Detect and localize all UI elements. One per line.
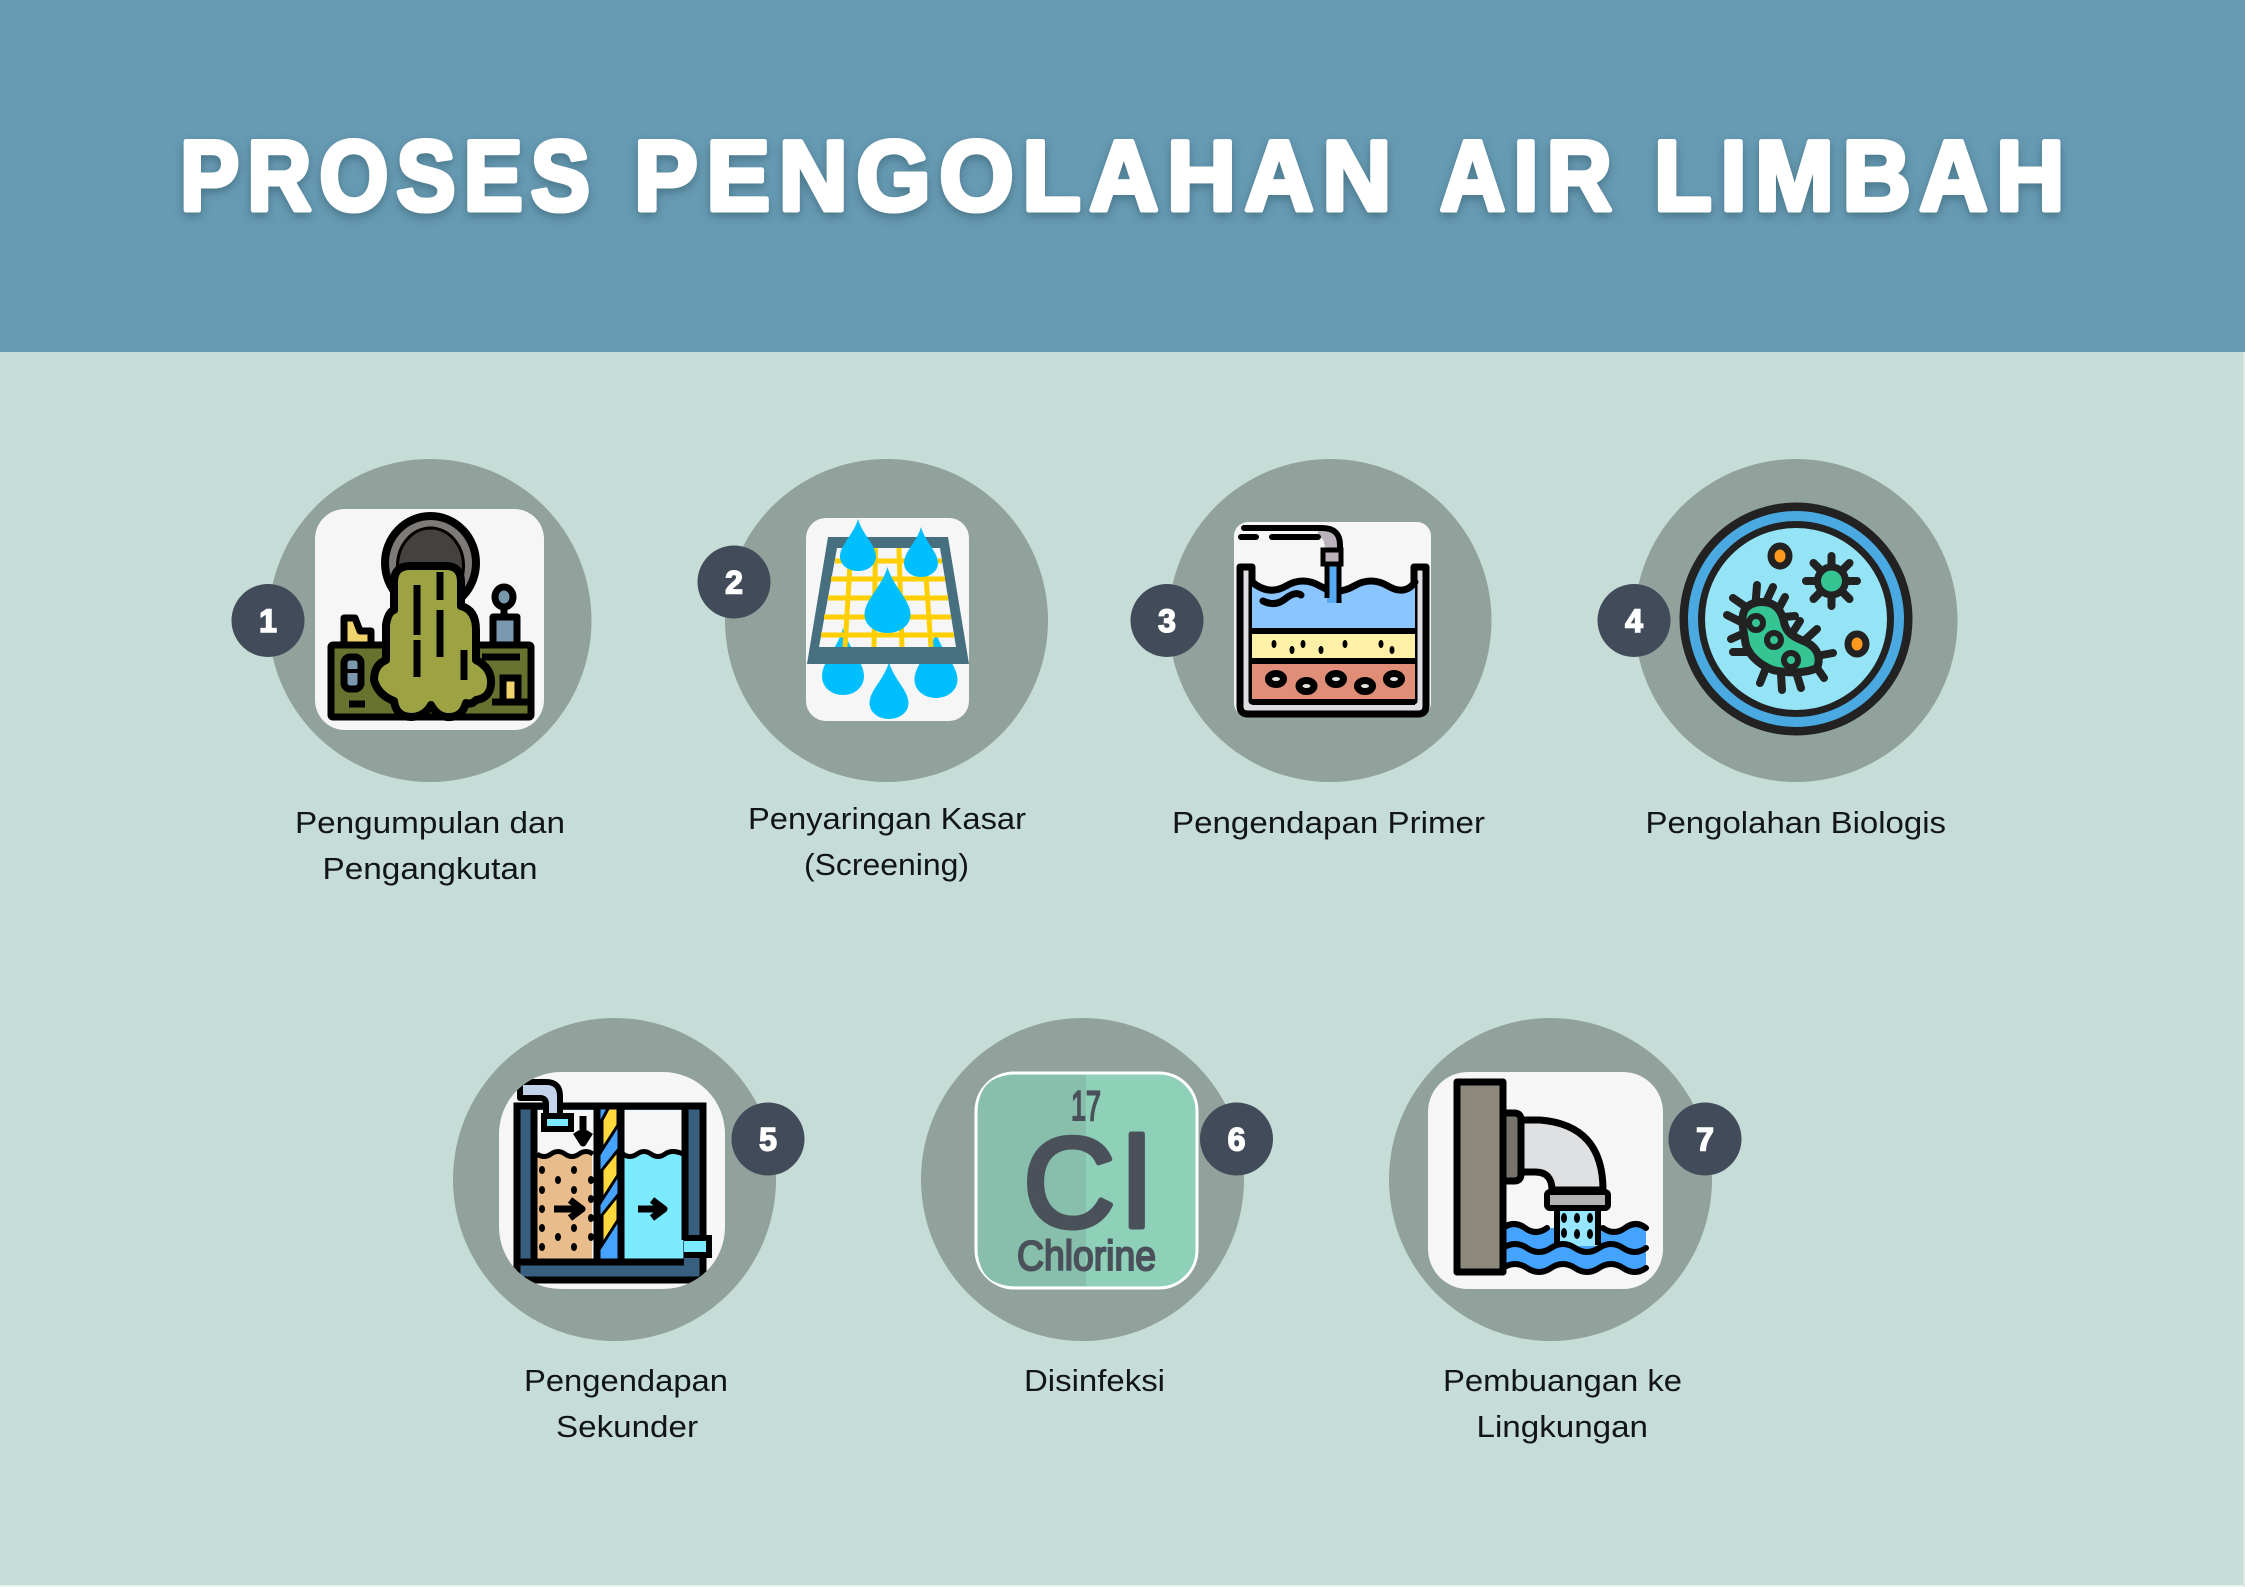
label 5: Sekunder xyxy=(556,1409,698,1444)
label 1 xyxy=(295,805,565,886)
number badge 2: 2 xyxy=(725,564,743,600)
step 2: Penyaringan Kasar xyxy=(698,459,1048,882)
number badge 4: 4 xyxy=(1625,603,1643,639)
label 7 xyxy=(1443,1363,1682,1444)
step 3: Pengendapan Primer xyxy=(1130,459,1492,840)
number badge 4 xyxy=(1598,584,1670,657)
label 5 xyxy=(524,1363,728,1444)
label 2: (Screening) xyxy=(804,847,969,882)
circle backdrop 3 xyxy=(1168,459,1492,782)
circle backdrop 4 xyxy=(1634,459,1958,782)
label 7: Pembuangan ke xyxy=(1443,1363,1682,1398)
number badge 7 xyxy=(1668,1102,1742,1176)
circle backdrop 6 xyxy=(921,1018,1244,1341)
label 2: Penyaringan Kasar xyxy=(748,801,1026,836)
circle backdrop 7 xyxy=(1389,1018,1712,1341)
icon: chlorine periodic table tile: 17 xyxy=(1071,1082,1101,1129)
title: PENGOLAHAN xyxy=(634,120,1400,231)
label 7: Lingkungan xyxy=(1476,1409,1648,1444)
number badge 1: 1 xyxy=(259,603,277,639)
icon: secondary settling tank xyxy=(499,1072,725,1289)
label 1: Pengangkutan xyxy=(322,851,538,886)
label 2 xyxy=(748,801,1026,882)
step 6: Disinfeksi xyxy=(921,1018,1273,1398)
icon: primary settling tank xyxy=(1234,522,1431,717)
number badge 2 xyxy=(698,546,770,618)
icon: petri dish with bacteria xyxy=(1680,502,1912,736)
step 5: Pengendapan Sekunder xyxy=(453,1018,804,1444)
number badge 3 xyxy=(1130,584,1204,657)
title xyxy=(180,120,2073,231)
icon: screening grid with water drops xyxy=(806,518,969,721)
number badge 3: 3 xyxy=(1158,603,1176,639)
step 1: Pengumpulan dan Pengangkutan xyxy=(232,459,592,886)
label 6: Disinfeksi xyxy=(1024,1363,1165,1398)
number badge 5: 5 xyxy=(759,1122,777,1158)
step 7: Pembuangan ke Lingkungan xyxy=(1389,1018,1742,1444)
circle backdrop 1 xyxy=(268,459,592,782)
number badge 6: 6 xyxy=(1228,1122,1245,1158)
label 1: Pengumpulan dan xyxy=(295,805,565,840)
circle backdrop 2 xyxy=(725,459,1048,782)
circle backdrop 5 xyxy=(453,1018,776,1341)
label 5: Pengendapan xyxy=(524,1363,728,1398)
icon: sewage pipe over factory xyxy=(315,509,544,730)
icon: chlorine periodic table tile: Chlorine xyxy=(1017,1232,1156,1279)
icon: outfall pipe discharging into water xyxy=(1428,1072,1663,1289)
label 4: Pengolahan Biologis xyxy=(1646,805,1946,840)
title: PROSES xyxy=(180,120,598,231)
number badge 6 xyxy=(1200,1102,1273,1176)
label 3: Pengendapan Primer xyxy=(1172,805,1485,840)
number badge 7: 7 xyxy=(1696,1122,1714,1158)
number badge 5 xyxy=(732,1102,804,1176)
icon: chlorine periodic table tile: Cl xyxy=(1023,1112,1151,1255)
step 4: Pengolahan Biologis xyxy=(1598,459,1958,840)
title: LIMBAH xyxy=(1654,120,2073,231)
title: AIR xyxy=(1440,120,1620,231)
number badge 1 xyxy=(232,584,304,657)
icon: chlorine periodic table tile xyxy=(976,1073,1197,1288)
header banner xyxy=(0,0,2245,352)
